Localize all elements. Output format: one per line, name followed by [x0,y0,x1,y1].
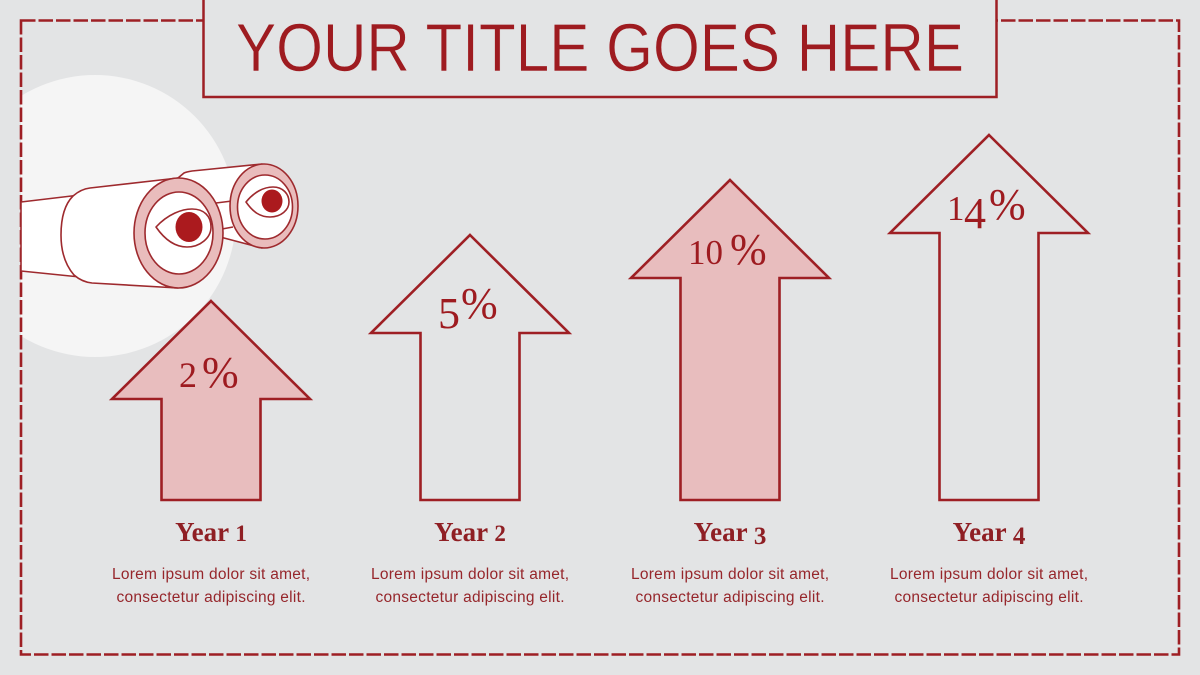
description: year 3: consectetur adipiscing elit. [636,589,824,606]
title: YOUR TITLE GOES HERE [236,10,964,86]
value: 2%: 2 [179,355,197,395]
title box [204,0,996,97]
arrow: 10% [631,180,829,500]
description: year 2: Lorem ipsum dolor sit amet, [371,566,569,583]
label: year 4: Year [953,517,1006,547]
small barrel [178,164,262,248]
value: 14%: 4 [964,189,986,238]
label: year 3: Year [694,517,747,547]
value: 2%: % [202,348,239,397]
value: 10%: % [730,225,767,274]
value: 5%: 5 [438,289,460,338]
left tube [21,195,80,277]
column: year 2 [371,235,569,606]
value: 10%: 10 [688,233,723,272]
description: year 3: Lorem ipsum dolor sit amet, [631,566,829,583]
icon: binoculars with eyes [21,164,298,288]
arrow: 14% [890,135,1088,500]
label: year 2: Year 2 [434,517,506,547]
large barrel [61,178,178,288]
value: 5%: % [461,279,498,328]
arrow: 2% [112,301,310,500]
description: year 4: Lorem ipsum dolor sit amet, [890,566,1088,583]
arrow: 5% [371,235,569,500]
label: year 1: Year 1 [175,517,247,547]
small lens [230,164,298,248]
large lens [134,178,223,288]
label: year 4: 4 [1013,523,1026,550]
description: year 1: Lorem ipsum dolor sit amet, [112,566,310,583]
value: 14%: 1 [947,189,964,228]
column: year 3 [631,180,829,606]
description: year 1: consectetur adipiscing elit. [116,589,306,606]
description: year 4: consectetur adipiscing elit. [894,589,1084,606]
value: 14%: % [989,180,1026,229]
label: year 3: 3 [754,523,766,550]
column: year 1 [112,301,310,606]
background circle [0,75,236,357]
description: year 2: consectetur adipiscing elit. [376,589,564,606]
column: year 4 [890,135,1088,606]
bridge lines [216,201,233,229]
